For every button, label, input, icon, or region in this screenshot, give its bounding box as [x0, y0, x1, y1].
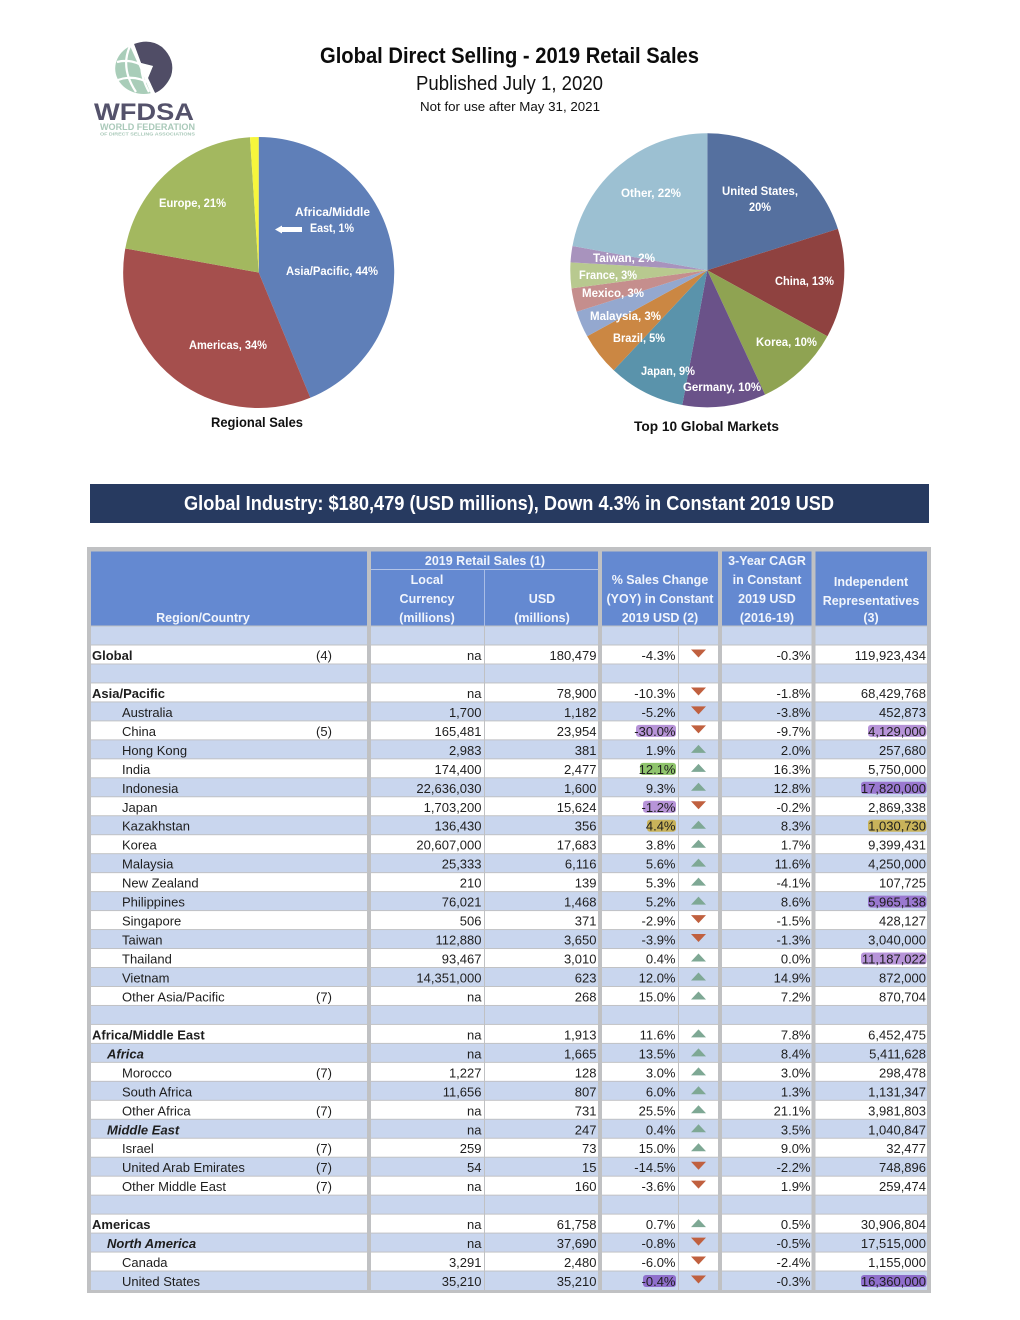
table row: Australia: 452,873 — [879, 705, 926, 720]
table row: India — [91, 759, 927, 777]
table row: Indonesia: 22,636,030 — [416, 781, 482, 796]
table row: Vietnam: 623 — [575, 970, 596, 985]
table row: China — [91, 721, 927, 739]
table row: Africa — [91, 1044, 927, 1062]
table row: Middle East: 247 — [575, 1122, 596, 1137]
table row: United Arab Emirates — [91, 1158, 927, 1176]
table row: Korea: 17,683 — [557, 838, 596, 853]
logo: WFDSA — [94, 42, 195, 136]
table row: Morocco: 3.0% — [646, 1065, 676, 1080]
table header: in Constant — [733, 573, 802, 587]
table row: United States: 16,360,000 — [861, 1274, 926, 1289]
table row: Australia: 1,700 — [449, 705, 482, 720]
pie chart: top 10 global markets: Brazil, 5% — [613, 333, 665, 345]
table row: Hong Kong: 1.9% — [646, 743, 676, 758]
table row: Malaysia: Malaysia — [122, 857, 174, 872]
table header: Currency — [400, 592, 454, 606]
table row: India: 12.1% — [639, 762, 676, 777]
table row: Other Asia/Pacific: 7.2% — [781, 989, 811, 1004]
table row: Other Africa: 3,981,803 — [868, 1103, 926, 1118]
pie chart: top 10 global markets: China, 13% — [775, 276, 834, 288]
table row: Africa/Middle East: Africa/Middle East — [92, 1027, 205, 1042]
table row: North America: -0.5% — [777, 1236, 811, 1251]
table row: Morocco: Morocco — [122, 1065, 172, 1080]
pie chart: regional sales: Africa/Middle — [295, 207, 370, 219]
table row: Africa/Middle East: 11.6% — [640, 1027, 676, 1042]
table row: Canada: -2.4% — [777, 1255, 811, 1270]
table row: Africa/Middle East: 7.8% — [781, 1027, 811, 1042]
table row: Indonesia: 17,820,000 — [861, 781, 926, 796]
table row: North America: na — [467, 1236, 482, 1251]
table row: Japan: -0.2% — [777, 800, 811, 815]
table row: Morocco — [91, 1063, 927, 1081]
table row: Japan: 1,703,200 — [424, 800, 482, 815]
table row: Japan: -1.2% — [642, 800, 676, 815]
table row: Singapore: 506 — [460, 914, 482, 929]
table row: Korea: Korea — [122, 838, 157, 853]
table header: (3) — [863, 611, 879, 625]
table row: China: (5) — [316, 724, 332, 739]
table row: Japan: 2,869,338 — [868, 800, 926, 815]
table row: Africa/Middle East: 6,452,475 — [868, 1027, 926, 1042]
table row: Other Africa: na — [467, 1103, 482, 1118]
table row: Americas: na — [467, 1217, 482, 1232]
table row: spacer — [91, 626, 927, 644]
table row: Asia/Pacific: 78,900 — [557, 686, 596, 701]
title: Global Direct Selling - 2019 Retail Sales — [320, 43, 699, 68]
table row: Global: -0.3% — [777, 648, 811, 663]
table row: Hong Kong: 2.0% — [781, 743, 811, 758]
table row: Asia/Pacific: Asia/Pacific — [92, 686, 165, 701]
table row: Middle East: 0.4% — [646, 1122, 676, 1137]
table row: Morocco: 3.0% — [781, 1065, 811, 1080]
table row: Other Africa: 25.5% — [639, 1103, 676, 1118]
note: validity: Not for use after May 31, 2021 — [420, 99, 600, 114]
table row: North America: 17,515,000 — [861, 1236, 926, 1251]
table header: (millions) — [399, 611, 455, 625]
table row: spacer — [91, 664, 927, 682]
table row: Other Middle East — [91, 1177, 927, 1195]
table row: Malaysia: 25,333 — [442, 857, 482, 872]
table row: New Zealand: New Zealand — [122, 876, 199, 891]
table row: Kazakhstan: 136,430 — [434, 819, 482, 834]
table row: Israel: 32,477 — [886, 1141, 926, 1156]
table header: % Sales Change — [612, 573, 708, 587]
table row: Global: na — [467, 648, 482, 663]
table column dividers — [367, 551, 816, 1291]
table header: (YOY) in Constant — [607, 592, 714, 606]
table row: Thailand — [91, 949, 927, 967]
table row: Vietnam: 14.9% — [774, 970, 811, 985]
table row: Israel: Israel — [122, 1141, 154, 1156]
table row: South Africa: 1,131,347 — [868, 1084, 926, 1099]
table row: Kazakhstan: 356 — [575, 819, 596, 834]
table row: India: 5,750,000 — [868, 762, 926, 777]
table row: Global: -4.3% — [642, 648, 676, 663]
table row: Vietnam: Vietnam — [122, 970, 169, 985]
table row: Australia: -3.8% — [777, 705, 811, 720]
table row: Israel: 9.0% — [781, 1141, 811, 1156]
table header: 2019 USD — [738, 592, 796, 606]
table row: South Africa: 6.0% — [646, 1084, 676, 1099]
table row: New Zealand: 139 — [575, 876, 596, 891]
table row: South Africa: 807 — [575, 1084, 596, 1099]
table row: Vietnam — [91, 968, 927, 986]
table row: Africa: na — [467, 1046, 482, 1061]
table row: India: 16.3% — [774, 762, 811, 777]
table row: Asia/Pacific — [91, 683, 927, 701]
table row: Asia/Pacific: -10.3% — [634, 686, 676, 701]
table row: Global: (4) — [316, 648, 332, 663]
table row: United Arab Emirates: 15 — [582, 1160, 596, 1175]
table row: Malaysia — [91, 854, 927, 872]
table row: Canada: -6.0% — [642, 1255, 676, 1270]
table row: India: 2,477 — [564, 762, 596, 777]
table row: Taiwan: -1.3% — [777, 933, 811, 948]
table row: Africa/Middle East: na — [467, 1027, 482, 1042]
table row: United Arab Emirates: -14.5% — [634, 1160, 676, 1175]
table row: Hong Kong: 381 — [575, 743, 596, 758]
table row: Thailand: 0.0% — [781, 952, 811, 967]
table row: Americas: 0.5% — [781, 1217, 811, 1232]
table header: 2019 Retail Sales (1) — [425, 554, 545, 568]
table row: Malaysia: 5.6% — [646, 857, 676, 872]
table row: Canada — [91, 1253, 927, 1271]
table row: United States: United States — [122, 1274, 201, 1289]
table row: Malaysia: 6,116 — [565, 857, 596, 872]
table row: Americas: Americas — [92, 1217, 151, 1232]
table row: Philippines: 5.2% — [646, 895, 676, 910]
table row: United States: -0.3% — [777, 1274, 811, 1289]
table row: Other Middle East: 1.9% — [781, 1179, 811, 1194]
caption: top 10 global markets: Top 10 Global Markets — [634, 418, 779, 434]
table row: Middle East: na — [467, 1122, 482, 1137]
table row: Africa/Middle East — [91, 1025, 927, 1043]
logo: WFDSA: OF DIRECT SELLING ASSOCIATIONS — [100, 132, 195, 136]
table row: North America: North America — [107, 1236, 196, 1251]
table row: Indonesia: 1,600 — [564, 781, 596, 796]
table row: Hong Kong — [91, 740, 927, 758]
table row: New Zealand: 210 — [460, 876, 482, 891]
table header: 2019 USD (2) — [622, 611, 698, 625]
table row: Philippines: 1,468 — [564, 895, 596, 910]
table row: Australia: -5.2% — [642, 705, 676, 720]
table row: Other Middle East: Other Middle East — [122, 1179, 226, 1194]
table row: United States — [91, 1272, 927, 1290]
table row: Global: 119,923,434 — [855, 648, 926, 663]
table row: Africa/Middle East: 1,913 — [564, 1027, 596, 1042]
table row: Asia/Pacific: -1.8% — [777, 686, 811, 701]
table row: Singapore: -2.9% — [642, 914, 676, 929]
table row: Philippines: Philippines — [122, 895, 185, 910]
table row: Japan: Japan — [122, 800, 157, 815]
table row: Middle East — [91, 1120, 927, 1138]
table row: Other Africa: (7) — [316, 1103, 332, 1118]
table row: United Arab Emirates: United Arab Emirates — [122, 1160, 245, 1175]
table row: China: 165,481 — [434, 724, 482, 739]
table row: Other Africa — [91, 1101, 927, 1119]
table row: Other Asia/Pacific: (7) — [316, 989, 332, 1004]
table row: Taiwan: 3,650 — [564, 933, 596, 948]
table header: (2016-19) — [740, 611, 794, 625]
table row: United States: 35,210 — [557, 1274, 596, 1289]
table row: Global: Global — [92, 648, 132, 663]
table row: United Arab Emirates: 748,896 — [879, 1160, 926, 1175]
table row: Africa: 1,665 — [564, 1046, 596, 1061]
table row: Vietnam: 14,351,000 — [416, 970, 482, 985]
table row: Middle East: 1,040,847 — [868, 1122, 926, 1137]
table row: Kazakhstan — [91, 816, 927, 834]
table row: Africa: Africa — [106, 1046, 144, 1061]
table row: Malaysia: 11.6% — [775, 857, 811, 872]
caption: regional sales: Regional Sales — [211, 414, 303, 430]
table row: North America: -0.8% — [642, 1236, 676, 1251]
pie chart: top 10 global markets: Japan, 9% — [641, 366, 695, 378]
pie chart: top 10 global markets: Korea, 10% — [756, 337, 817, 349]
logo: WFDSA: WFDSA — [94, 99, 194, 126]
table row: spacer — [91, 1006, 927, 1024]
table row: Middle East: Middle East — [107, 1122, 180, 1137]
table row: Asia/Pacific: 68,429,768 — [861, 686, 926, 701]
table frame — [87, 547, 931, 1293]
pie chart: top 10 global markets: 20% — [749, 202, 771, 214]
table row: Singapore: 428,127 — [879, 914, 926, 929]
table row: Japan: 15,624 — [557, 800, 596, 815]
banner: global industry: Global Industry: $180,479 (USD millions), Down 4.3% in Constant 2019 USD — [184, 493, 834, 515]
table row: China: -30.0% — [634, 724, 676, 739]
table row: Thailand: 11,187,022 — [862, 952, 926, 967]
table row: Canada: 2,480 — [564, 1255, 596, 1270]
table row: Other Africa: 731 — [575, 1103, 596, 1118]
table row: South Africa: South Africa — [122, 1084, 193, 1099]
table row: Israel: 15.0% — [639, 1141, 676, 1156]
table row: Taiwan: -3.9% — [642, 933, 676, 948]
table row: Other Middle East: -3.6% — [642, 1179, 676, 1194]
table row: Malaysia: 4,250,000 — [868, 857, 926, 872]
table row: Singapore: 371 — [575, 914, 596, 929]
table row: Taiwan — [91, 930, 927, 948]
table row: United Arab Emirates: (7) — [316, 1160, 332, 1175]
table row: Thailand: 0.4% — [646, 952, 676, 967]
table row: North America — [91, 1234, 927, 1252]
table row: Africa: 13.5% — [639, 1046, 676, 1061]
table row: Korea — [91, 835, 927, 853]
table row: Kazakhstan: Kazakhstan — [122, 819, 190, 834]
table row: Canada: 1,155,000 — [868, 1255, 926, 1270]
table row: Australia — [91, 702, 927, 720]
pie chart: top 10 global markets: Germany, 10% — [683, 382, 761, 394]
banner: global industry — [90, 484, 929, 523]
table row: Philippines: 5,965,138 — [868, 895, 926, 910]
table row: China: 23,954 — [557, 724, 596, 739]
table row: New Zealand: 5.3% — [646, 876, 676, 891]
table row: Israel: (7) — [316, 1141, 332, 1156]
table row: Australia: Australia — [122, 705, 173, 720]
pie chart: regional sales — [123, 137, 394, 408]
table row: United States: -0.4% — [642, 1274, 676, 1289]
table row: Indonesia — [91, 778, 927, 796]
table row: Morocco: (7) — [316, 1065, 332, 1080]
table row: Vietnam: 872,000 — [879, 970, 926, 985]
table row: Americas: 61,758 — [557, 1217, 596, 1232]
table row: Other Asia/Pacific: 870,704 — [879, 989, 926, 1004]
table header: Representatives — [823, 594, 919, 608]
table row: Korea: 20,607,000 — [416, 838, 482, 853]
table row: New Zealand: -4.1% — [777, 876, 811, 891]
table header: USD — [529, 592, 555, 606]
table header: Region/Country — [156, 611, 250, 625]
pie chart: regional sales: Americas, 34% — [189, 340, 267, 352]
table row: China: -9.7% — [777, 724, 811, 739]
table row: Morocco: 1,227 — [449, 1065, 482, 1080]
table row: Japan — [91, 797, 927, 815]
table row: Other Asia/Pacific: Other Asia/Pacific — [122, 989, 225, 1004]
table row: United Arab Emirates: 54 — [467, 1160, 482, 1175]
table row: Other Middle East: na — [467, 1179, 482, 1194]
pie chart: regional sales: Asia/Pacific, 44% — [286, 266, 378, 278]
table row: Korea: 9,399,431 — [868, 838, 926, 853]
pie chart: top 10 global markets: Malaysia, 3% — [590, 311, 661, 323]
table row: Americas: 30,906,804 — [861, 1217, 926, 1232]
table row: Africa: 8.4% — [781, 1046, 811, 1061]
table header: Independent — [834, 575, 909, 589]
table row: Thailand: Thailand — [122, 952, 172, 967]
table row: Other Asia/Pacific — [91, 987, 927, 1005]
table row: Philippines: 76,021 — [442, 895, 482, 910]
table row: North America: 37,690 — [557, 1236, 596, 1251]
table row: Morocco: 298,478 — [879, 1065, 926, 1080]
table row: Israel — [91, 1139, 927, 1157]
table row: spacer — [91, 1196, 927, 1214]
table row: Vietnam: 12.0% — [639, 970, 676, 985]
table row: Taiwan: Taiwan — [122, 933, 162, 948]
pie chart: regional sales: East, 1% — [310, 223, 354, 235]
table row: New Zealand: 107,725 — [879, 876, 926, 891]
table row: Korea: 1.7% — [781, 838, 811, 853]
table row: Indonesia: 9.3% — [646, 781, 676, 796]
table header: (millions) — [514, 611, 570, 625]
table row: Israel: 73 — [582, 1141, 596, 1156]
table row: United Arab Emirates: -2.2% — [777, 1160, 811, 1175]
table row: Korea: 3.8% — [646, 838, 676, 853]
table row: Thailand: 3,010 — [564, 952, 596, 967]
pie chart: regional sales: Europe, 21% — [159, 198, 226, 210]
table row: Other Middle East: 160 — [575, 1179, 596, 1194]
pie chart: top 10 global markets: United States, — [722, 186, 798, 198]
table row: Other Asia/Pacific: 15.0% — [639, 989, 676, 1004]
table row: Indonesia: 12.8% — [774, 781, 811, 796]
table row: Other Asia/Pacific: 268 — [575, 989, 596, 1004]
table row: Israel: 259 — [460, 1141, 482, 1156]
pie chart: top 10 global markets: Mexico, 3% — [582, 288, 644, 300]
table row: South Africa — [91, 1082, 927, 1100]
table row: Other Africa: 21.1% — [774, 1103, 811, 1118]
table row: South Africa: 1.3% — [781, 1084, 811, 1099]
logo: WFDSA: WORLD FEDERATION — [100, 122, 195, 132]
table row: Morocco: 128 — [575, 1065, 596, 1080]
table row: Kazakhstan: 4.4% — [646, 819, 676, 834]
table row: Hong Kong: 257,680 — [879, 743, 926, 758]
table row: India: India — [122, 762, 151, 777]
table row: Asia/Pacific: na — [467, 686, 482, 701]
table header: Local — [411, 573, 443, 587]
pie chart: top 10 global markets — [570, 133, 844, 407]
table row: Australia: 1,182 — [564, 705, 596, 720]
table row: Canada: Canada — [122, 1255, 168, 1270]
table row: Philippines: 8.6% — [781, 895, 811, 910]
pie chart: top 10 global markets: France, 3% — [579, 270, 637, 282]
table row: United States: 35,210 — [442, 1274, 482, 1289]
table row: China: 4,129,000 — [868, 724, 926, 739]
table row: Indonesia: Indonesia — [122, 781, 179, 796]
table row: India: 174,400 — [434, 762, 482, 777]
table row: Americas — [91, 1215, 927, 1233]
table header — [91, 552, 927, 626]
table row: Singapore: -1.5% — [777, 914, 811, 929]
table row: Other Asia/Pacific: na — [467, 989, 482, 1004]
table row: Other Africa: Other Africa — [122, 1103, 191, 1118]
table row: Other Middle East: 259,474 — [879, 1179, 926, 1194]
table row: Singapore — [91, 911, 927, 929]
table row: Middle East: 3.5% — [781, 1122, 811, 1137]
table row: Taiwan: 3,040,000 — [868, 933, 926, 948]
pie chart: top 10 global markets: Other, 22% — [621, 188, 681, 200]
table row: Kazakhstan: 8.3% — [781, 819, 811, 834]
table row: Hong Kong: Hong Kong — [122, 743, 187, 758]
table header: 3-Year CAGR — [728, 554, 806, 568]
table row: Global: 180,479 — [550, 648, 596, 663]
pie chart: top 10 global markets: Taiwan, 2% — [593, 253, 655, 265]
table row: Hong Kong: 2,983 — [449, 743, 482, 758]
table row: Other Middle East: (7) — [316, 1179, 332, 1194]
table row: Canada: 3,291 — [449, 1255, 482, 1270]
table row: Global — [91, 646, 927, 664]
table row: Americas: 0.7% — [646, 1217, 676, 1232]
table row: China: China — [122, 724, 157, 739]
table row: New Zealand — [91, 873, 927, 891]
table row: Taiwan: 112,880 — [435, 933, 482, 948]
table row: South Africa: 11,656 — [443, 1084, 482, 1099]
table row: Thailand: 93,467 — [442, 952, 482, 967]
table row: Philippines — [91, 892, 927, 910]
table row: Singapore: Singapore — [122, 914, 181, 929]
table row: Africa: 5,411,628 — [869, 1046, 926, 1061]
table row: Kazakhstan: 1,030,730 — [868, 819, 926, 834]
subtitle: published date: Published July 1, 2020 — [416, 73, 603, 95]
